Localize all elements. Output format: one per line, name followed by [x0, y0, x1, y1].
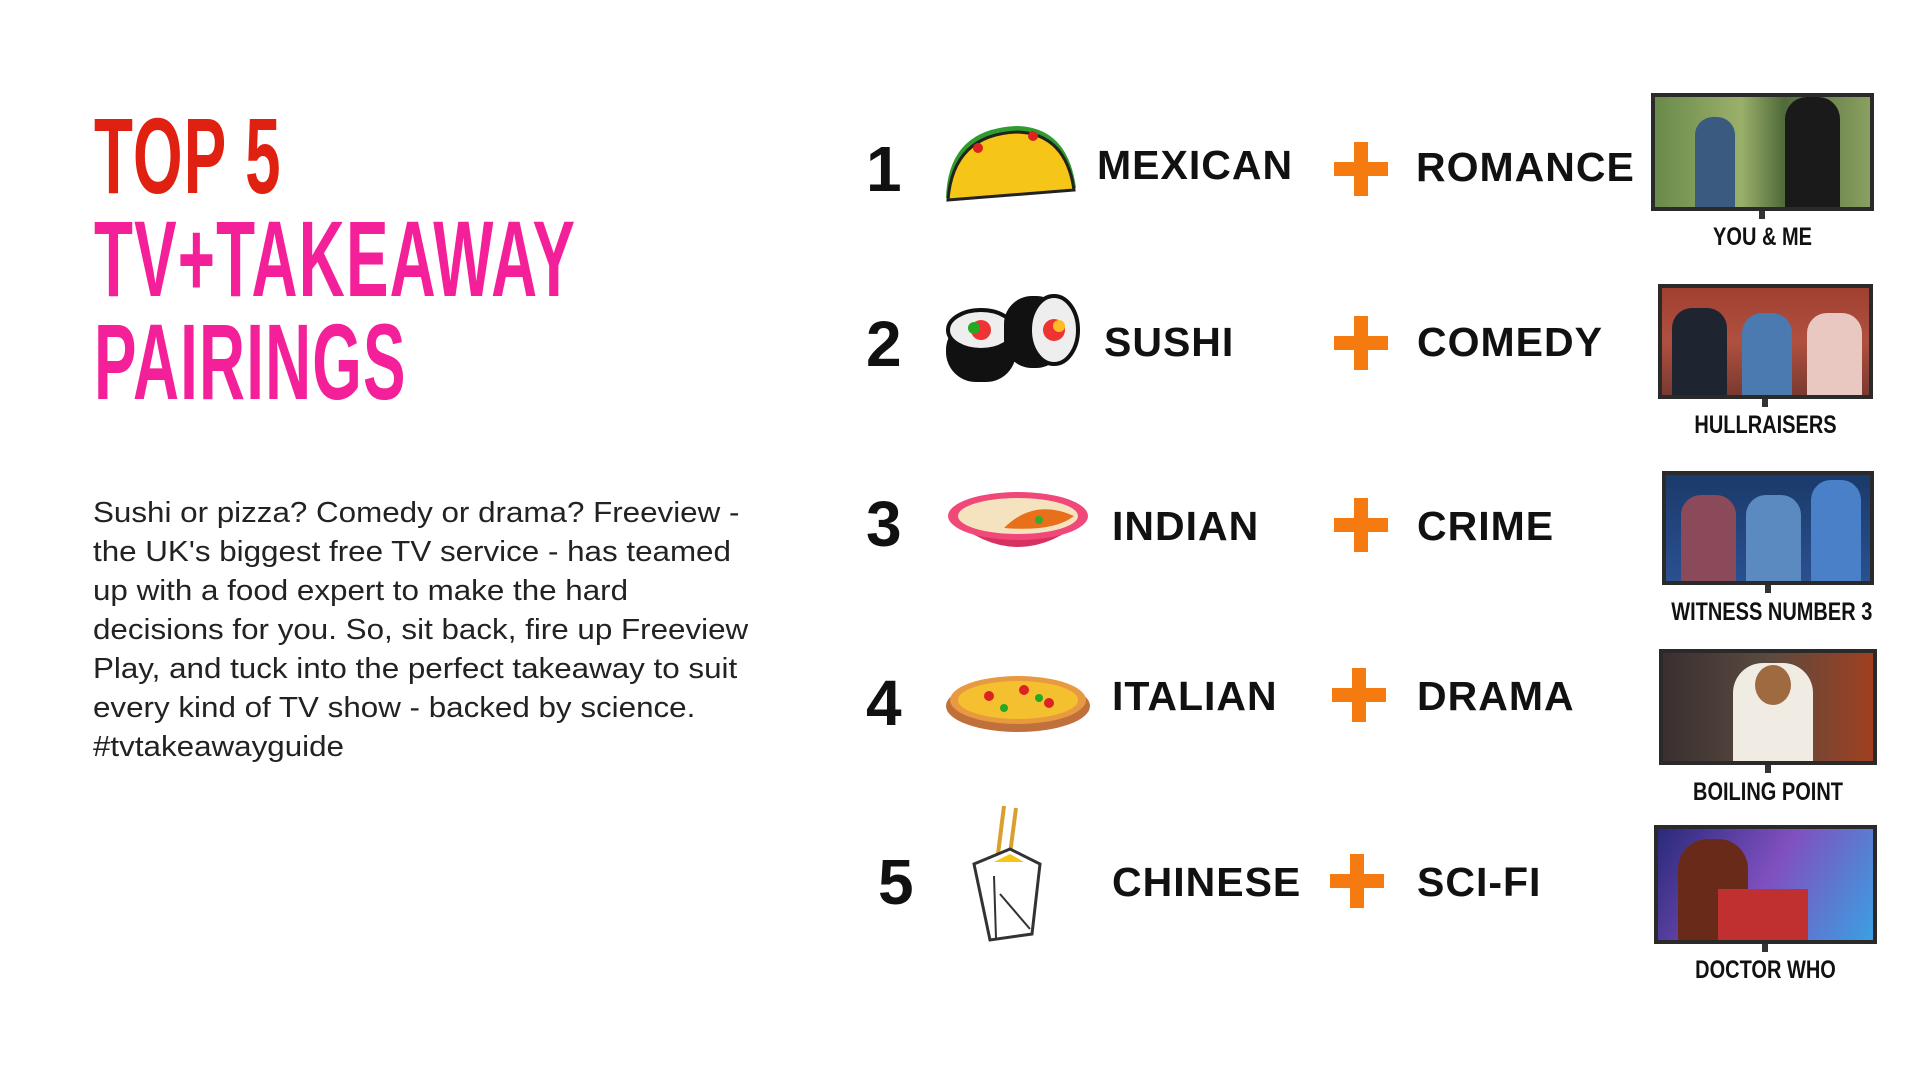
- label: you & me: YOU & ME: [1713, 223, 1812, 251]
- genre: sci-fi: SCI-FI: [1417, 859, 1541, 905]
- intro paragraph: every kind of TV show - backed by science.: [93, 692, 695, 724]
- intro paragraph: #tvtakeawayguide: [93, 731, 344, 763]
- title line: pairings: PAIRINGS: [94, 301, 407, 422]
- icon: plus: [1334, 498, 1388, 552]
- icon: chinese takeout box: [972, 806, 1042, 942]
- number 3: 3: [866, 488, 902, 560]
- food: mexican: MEXICAN: [1097, 142, 1293, 188]
- genre: comedy: COMEDY: [1417, 319, 1603, 365]
- label: hullraisers: HULLRAISERS: [1694, 411, 1837, 439]
- row 5: [878, 806, 1877, 984]
- tv: doctor who: [1654, 825, 1877, 984]
- food: chinese: CHINESE: [1112, 859, 1301, 905]
- title line: top 5: TOP 5: [94, 95, 282, 216]
- food: italian: ITALIAN: [1112, 673, 1278, 719]
- title: [94, 95, 576, 422]
- title line: tv+takeaway: TV+TAKEAWAY: [94, 198, 576, 319]
- genre: crime: CRIME: [1417, 503, 1554, 549]
- intro paragraph: decisions for you. So, sit back, fire up Freeview: [93, 614, 748, 646]
- tv: boiling point: [1659, 649, 1877, 806]
- label: witness number 3: WITNESS NUMBER 3: [1671, 598, 1872, 626]
- intro paragraph: Sushi or pizza? Comedy or drama? Freeview -: [93, 497, 739, 529]
- icon: sushi: [946, 294, 1080, 382]
- intro paragraph: Play, and tuck into the perfect takeaway to suit: [93, 653, 737, 685]
- row 4: [866, 649, 1877, 806]
- icon: plus: [1330, 854, 1384, 908]
- intro paragraph: up with a food expert to make the hard: [93, 575, 628, 607]
- row 1: [866, 93, 1874, 251]
- row 2: [866, 284, 1873, 439]
- icon: indian curry bowl: [948, 492, 1088, 547]
- tv: you & me: [1651, 93, 1874, 251]
- food: sushi: SUSHI: [1104, 319, 1234, 365]
- tv: hullraisers: [1658, 284, 1873, 439]
- number 5: 5: [878, 846, 914, 918]
- number 4: 4: [866, 667, 902, 739]
- label: boiling point: BOILING POINT: [1693, 778, 1843, 806]
- icon: pizza: [946, 676, 1090, 732]
- intro paragraph: [93, 497, 748, 763]
- number 1: 1: [866, 133, 902, 205]
- icon: plus: [1334, 142, 1388, 196]
- intro paragraph: the UK's biggest free TV service - has teamed: [93, 536, 731, 568]
- genre: drama: DRAMA: [1417, 673, 1575, 719]
- genre: romance: ROMANCE: [1416, 144, 1635, 190]
- tv: witness number 3: [1662, 471, 1874, 626]
- label: doctor who: DOCTOR WHO: [1695, 956, 1836, 984]
- icon: taco: [946, 126, 1076, 202]
- food: indian: INDIAN: [1112, 503, 1259, 549]
- row 3: [866, 471, 1874, 626]
- number 2: 2: [866, 308, 902, 380]
- icon: plus: [1334, 316, 1388, 370]
- icon: plus: [1332, 668, 1386, 722]
